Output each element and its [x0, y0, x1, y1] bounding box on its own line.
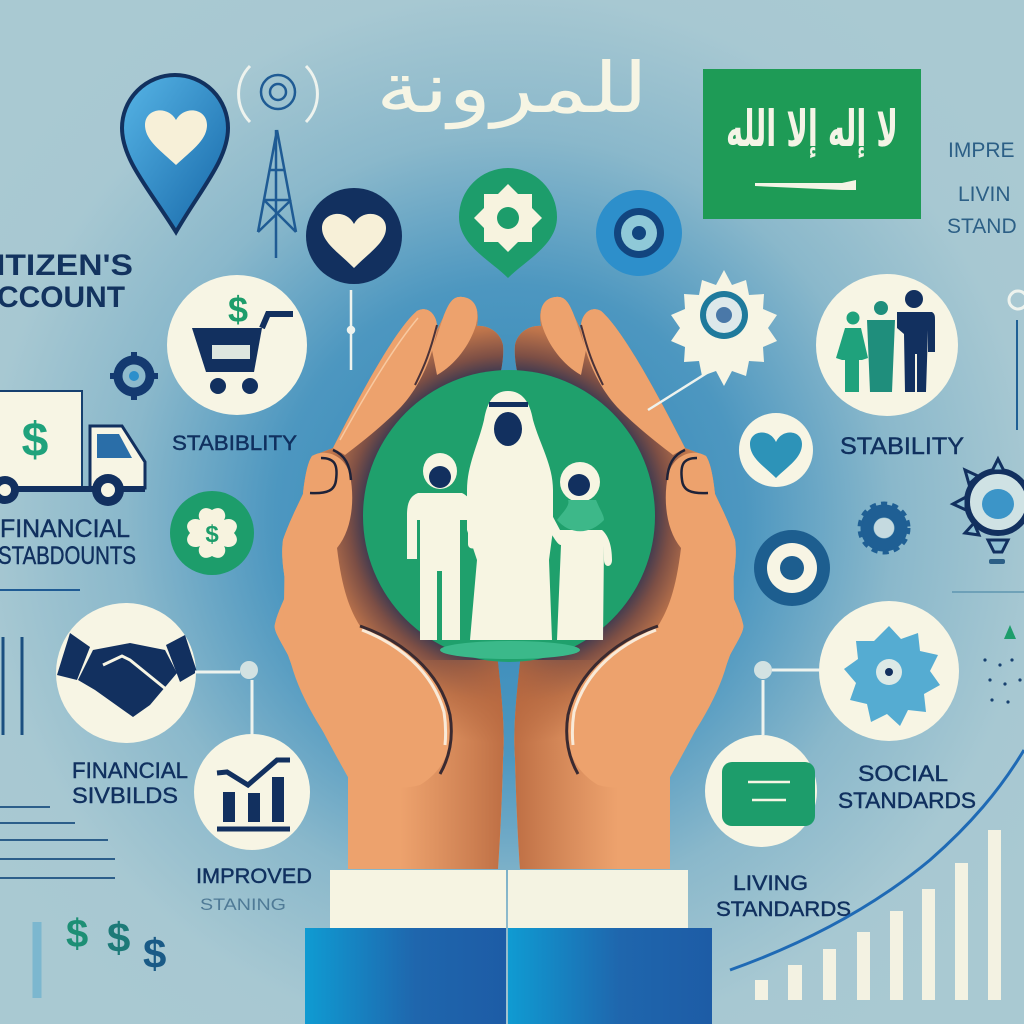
- text: improved staning: [196, 865, 312, 914]
- flag of Saudi Arabia: [703, 69, 921, 219]
- icon: delivery truck: [0, 391, 145, 506]
- cuffs: [330, 870, 688, 928]
- text: citizen's account: [0, 249, 133, 314]
- text: improved living standards top right: LIVIN: [958, 183, 1011, 206]
- text: financial stabdounts: [0, 515, 136, 570]
- icon: heart circle right: [739, 413, 813, 487]
- icon: gear bulb far right: [953, 459, 1024, 564]
- text: social standards: STANDARDS: [838, 788, 976, 813]
- text: living standards: STANDARDS: [716, 898, 851, 921]
- icon: dollar signs: $: [143, 930, 166, 977]
- icon: heart circle: [306, 188, 402, 284]
- icon: dollar signs: $: [66, 912, 88, 956]
- text: stability right: STABILITY: [840, 433, 964, 460]
- text: financial stabdounts: FINANCIAL: [0, 515, 130, 543]
- icon: dollar signs: $: [107, 914, 130, 961]
- text: financial sivbilds: SIVBILDS: [72, 783, 178, 808]
- text: citizen's account: CCOUNT: [0, 281, 125, 314]
- text: financial stabdounts: STABDOUNTS: [0, 542, 136, 570]
- icon: gear right: [860, 504, 908, 552]
- mother figure: [545, 462, 612, 640]
- child figure: [407, 453, 477, 640]
- icon: handshake: [56, 603, 197, 743]
- icon: location pin with heart: [122, 75, 228, 232]
- icon: dollar signs: [66, 912, 166, 977]
- connector left: [195, 661, 258, 735]
- family circle: [363, 370, 655, 662]
- text: stability left: STABIBLITY: [172, 432, 297, 455]
- flag of Saudi Arabia: لا إله إلا الله: [726, 100, 898, 159]
- sleeves: [305, 928, 712, 1024]
- icon: signal tower: [239, 66, 317, 258]
- connector right: [754, 661, 820, 735]
- connector: center: [348, 290, 718, 410]
- icon: green dollar flower: [170, 491, 254, 575]
- icon: saudi flag circle: [705, 735, 817, 847]
- text: improved staning: IMPROVED: [196, 865, 312, 888]
- title: للمرونة: [376, 47, 648, 130]
- left hand: [270, 290, 510, 880]
- icon: family in circle: [816, 274, 958, 416]
- text: improved staning: STANING: [200, 895, 286, 914]
- text: living standards: LIVING: [733, 872, 808, 895]
- divider: [0, 589, 80, 591]
- text: social standards: SOCIAL: [858, 761, 948, 786]
- text: financial sivbilds: [72, 758, 188, 808]
- text: improved living standards top right: STAND: [947, 215, 1017, 238]
- icon: teal flower circle: [819, 601, 959, 741]
- right hand: [508, 290, 748, 880]
- icon: shopping cart: $: [228, 289, 248, 330]
- icon: dark circle badge: [754, 530, 830, 606]
- text: living standards: [716, 872, 851, 921]
- father figure: [467, 391, 553, 640]
- icon: green pin: [459, 168, 557, 278]
- icon: white gear top right: [671, 270, 777, 386]
- left lines: [0, 807, 115, 878]
- text: financial sivbilds: FINANCIAL: [72, 758, 188, 783]
- icon: blue gear circle: [596, 190, 682, 276]
- chart lines left: [3, 637, 22, 735]
- icon: gear small left: [110, 352, 158, 400]
- text: improved living standards top right: IMPRE: [948, 139, 1015, 162]
- decoration right side: [952, 291, 1024, 704]
- icon: shopping cart: [167, 275, 307, 415]
- icon: delivery truck: $: [22, 414, 49, 467]
- text: improved living standards top right: [947, 139, 1017, 238]
- icon: green dollar flower: $: [205, 521, 219, 548]
- text: social standards: [838, 761, 976, 813]
- icon: bar chart circle: [194, 734, 310, 850]
- hands holding the family circle: [270, 290, 748, 880]
- growth chart bottom right: [730, 750, 1024, 1000]
